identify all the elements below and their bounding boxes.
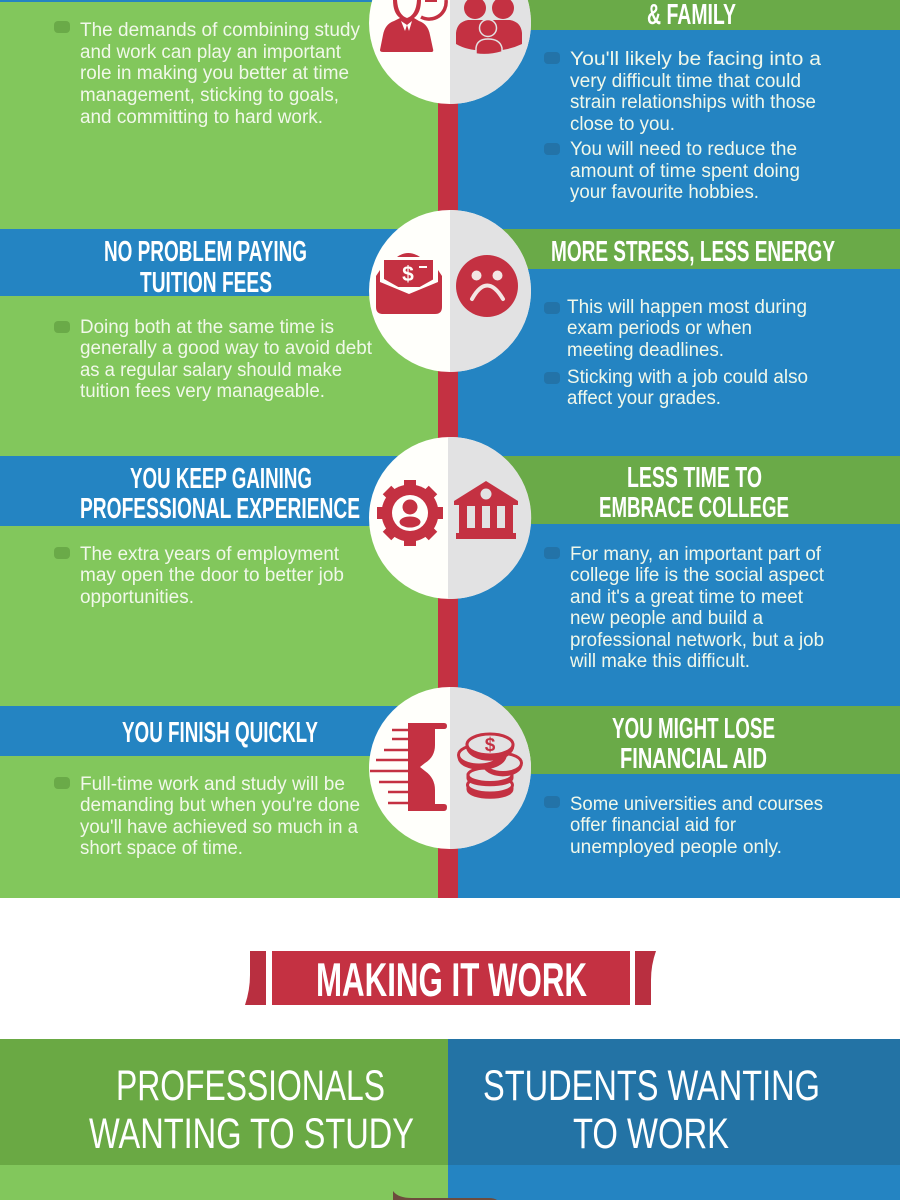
panel: professionals wanting to study [0,1039,448,1200]
panel: pros background [0,0,438,898]
heading: embrace college: LESS TIME TO [627,462,762,494]
text: tuition benefit: generally a good way to avoid debt [80,338,373,359]
text: financial aid drawback: unemployed people only. [570,837,782,858]
panel: less time to embrace college [500,456,900,672]
icon circle: time and money [369,687,531,849]
panel: friends and family [500,0,900,203]
text: relationships and hobbies: close to you. [570,114,675,135]
text: relationships and hobbies: You will need to reduce the [570,139,797,160]
text: stress drawbacks: exam periods or when [567,318,752,339]
text: relationships and hobbies: You'll likely be facing into a [570,49,821,70]
heading: embrace college [599,462,789,524]
text: relationships and hobbies [570,49,821,203]
icon circle: career and college [369,437,531,599]
heading: professionals wanting to study [89,1062,414,1158]
text: time management benefit: and committing to hard work. [80,107,323,128]
heading: embrace college: EMBRACE COLLEGE [599,492,789,524]
text: employment benefit: The extra years of employment [80,544,340,565]
panel: cons background [458,0,900,898]
text: stress drawbacks: This will happen most during [567,297,807,318]
text: finish quickly benefit: Full-time work and study will be [80,774,345,795]
text: relationships and hobbies: strain relationships with those [570,92,816,113]
heading: tuition fees: NO PROBLEM PAYING [104,236,307,268]
text: finish quickly benefit [80,774,360,859]
panel: you keep gaining professional experience [0,456,400,608]
heading: tuition fees: TUITION FEES [140,267,272,299]
text: college life drawback: professional network, but a job [570,630,824,651]
panel: you might lose financial aid [500,706,900,858]
text: college life drawback: will make this difficult. [569,651,750,672]
text: finish quickly benefit: short space of time. [80,838,243,859]
ribbon: making it work [245,951,656,1006]
text: college life drawback: new people and build a [570,608,763,629]
icon: envelope with cash [376,253,442,314]
heading: professionals wanting to study: PROFESSIONALS [116,1062,385,1110]
icon circle: money and stress [369,210,531,372]
text: stress drawbacks [567,297,808,409]
heading: making it work: MAKING IT WORK [316,953,587,1006]
text: relationships and hobbies: amount of time spent doing [570,161,800,182]
icon: business person [380,0,446,52]
panel: students wanting to work [448,1039,900,1200]
text: finish quickly benefit: you'll have achieved so much in a [80,817,358,838]
text: time management benefit: role in making you better at time [80,63,349,84]
icon: gear with person [377,480,443,546]
icon: envelope with cash: $ [402,263,414,286]
icon: family group [456,0,522,55]
text: employment benefit: opportunities. [80,587,194,608]
heading: professionals wanting to study: WANTING TO STUDY [89,1110,414,1158]
text: employment benefit: may open the door to better job [80,565,344,586]
heading: professional experience [80,463,360,525]
text: tuition benefit: as a regular salary should make [80,360,342,381]
text: time management benefit [80,20,360,128]
icon: coin stack: $ [485,735,496,756]
text: tuition benefit: Doing both at the same time is [80,317,334,338]
text: time management benefit: management, sticking to goals, [80,85,339,106]
text: stress drawbacks: Sticking with a job could also [567,367,808,388]
text: tuition benefit: tuition fees very manageable. [80,381,325,402]
panel: more stress, less energy [500,229,900,409]
heading: professional experience: PROFESSIONAL EXPERIENCE [80,493,360,525]
text: college life drawback: For many, an important part of [570,544,822,565]
heading: financial aid: FINANCIAL AID [620,743,767,775]
icon: brown shape at bottom edge [393,1191,497,1200]
text: relationships and hobbies: very difficult time that could [570,71,801,92]
panel: better time management [0,0,372,128]
central divider bar [438,0,458,898]
text: college life drawback [569,544,825,672]
text: finish quickly benefit: demanding but when you're done [80,795,360,816]
text: relationships and hobbies: your favourite hobbies. [570,182,759,203]
text: stress drawbacks: affect your grades. [567,388,721,409]
text: stress drawbacks: meeting deadlines. [567,340,724,361]
heading: students wanting to work: TO WORK [573,1110,729,1158]
icon: coin stack [458,734,522,797]
icon circle: professional and family [369,0,531,104]
heading: finish quickly: YOU FINISH QUICKLY [122,717,318,749]
text: financial aid drawback [570,794,823,858]
text: college life drawback: and it's a great time to meet [570,587,804,608]
icon: hourglass with speed lines [370,723,447,811]
icon: college building [454,481,518,539]
text: financial aid drawback: offer financial aid for [570,815,737,836]
panel: no problem paying tuition fees [0,229,400,402]
icon: sad face [456,255,518,317]
heading: tuition fees [104,236,307,299]
text: tuition benefit [80,317,373,402]
heading: professional experience: YOU KEEP GAINING [130,463,312,495]
text: time management benefit: and work can play an important [80,42,342,63]
text: employment benefit [80,544,344,608]
heading: financial aid: YOU MIGHT LOSE [612,713,775,745]
text: financial aid drawback: Some universities and courses [570,794,823,815]
heading: financial aid [612,713,775,775]
panel: you finish quickly [0,706,400,859]
text: time management benefit: The demands of combining study [80,20,360,41]
heading: students wanting to work [483,1062,820,1158]
text: college life drawback: college life is the social aspect [570,565,825,586]
